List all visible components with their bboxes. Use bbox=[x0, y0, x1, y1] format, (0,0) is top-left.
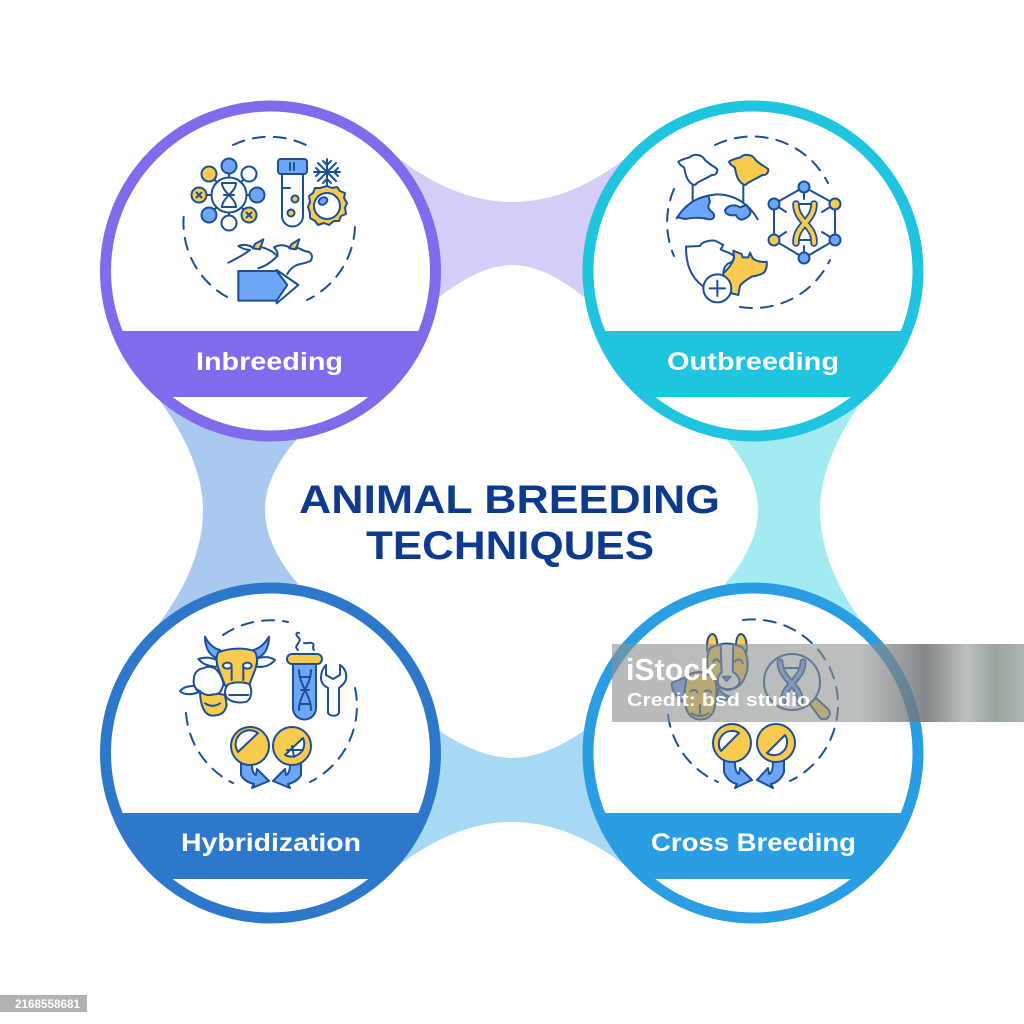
icon: magnifier with DNA bbox=[764, 654, 830, 719]
label band: Hybridization bbox=[122, 813, 418, 879]
icon: pills with arrows bbox=[713, 724, 795, 788]
panel: Hybridization bbox=[100, 588, 441, 918]
image id tag bbox=[0, 995, 87, 1012]
icon: frozen cell bbox=[308, 159, 347, 225]
label: Hybridization: Hybridization bbox=[181, 829, 361, 857]
label: Inbreeding: Inbreeding bbox=[196, 348, 343, 376]
icon: pills with arrows bbox=[231, 727, 311, 788]
label: Cross Breeding: Cross Breeding bbox=[651, 829, 856, 857]
connector: Inbreeding to Hybridization bbox=[158, 398, 298, 625]
icon group: Hybridization bbox=[180, 620, 357, 788]
icon: test tube bbox=[278, 159, 307, 226]
dashed ring bbox=[183, 137, 355, 300]
label band: Outbreeding bbox=[605, 331, 901, 397]
label band: Inbreeding bbox=[122, 331, 418, 397]
icon group: Outbreeding bbox=[667, 136, 840, 308]
icon: wrench bbox=[321, 665, 346, 716]
ring: Cross Breeding bbox=[588, 588, 918, 918]
icon: crossed pigs bbox=[686, 241, 767, 302]
title bbox=[299, 478, 720, 568]
watermark band bbox=[612, 644, 1024, 722]
connector: Outbreeding to Cross Breeding bbox=[725, 398, 864, 625]
connector: Inbreeding to Outbreeding bbox=[397, 157, 627, 298]
watermark: iStock: iStock bbox=[626, 652, 718, 687]
label: Outbreeding: Outbreeding bbox=[667, 348, 839, 376]
panel: Outbreeding bbox=[583, 106, 924, 436]
dashed ring bbox=[668, 619, 838, 782]
ring: Inbreeding bbox=[106, 106, 436, 436]
label band: Cross Breeding bbox=[605, 813, 901, 879]
title: TECHNIQUES bbox=[366, 524, 654, 568]
dashed ring bbox=[667, 136, 830, 308]
icon: test tube with DNA bbox=[287, 633, 322, 720]
title: ANIMAL BREEDING bbox=[299, 478, 720, 522]
icon group: Inbreeding bbox=[183, 137, 355, 303]
icon: DNA molecule bbox=[768, 182, 840, 264]
ring: Hybridization bbox=[106, 588, 436, 918]
icon: globe with two cows bbox=[677, 155, 768, 220]
watermark: credit: Credit: bsd studio bbox=[627, 690, 810, 710]
icon group: Cross Breeding bbox=[668, 619, 838, 788]
panel: Cross Breeding bbox=[583, 588, 924, 918]
ring: Outbreeding bbox=[588, 106, 918, 436]
icon: hybrid cow and sheep bbox=[180, 637, 275, 716]
panel: Inbreeding bbox=[100, 106, 441, 436]
icon: DNA network bbox=[192, 158, 264, 230]
dashed ring bbox=[186, 620, 357, 783]
image id tag: 2168558681 bbox=[15, 999, 81, 1011]
icon: cattle bbox=[228, 239, 312, 303]
connector: Hybridization to Cross Breeding bbox=[397, 730, 627, 867]
icon: two dogs bbox=[672, 634, 748, 719]
